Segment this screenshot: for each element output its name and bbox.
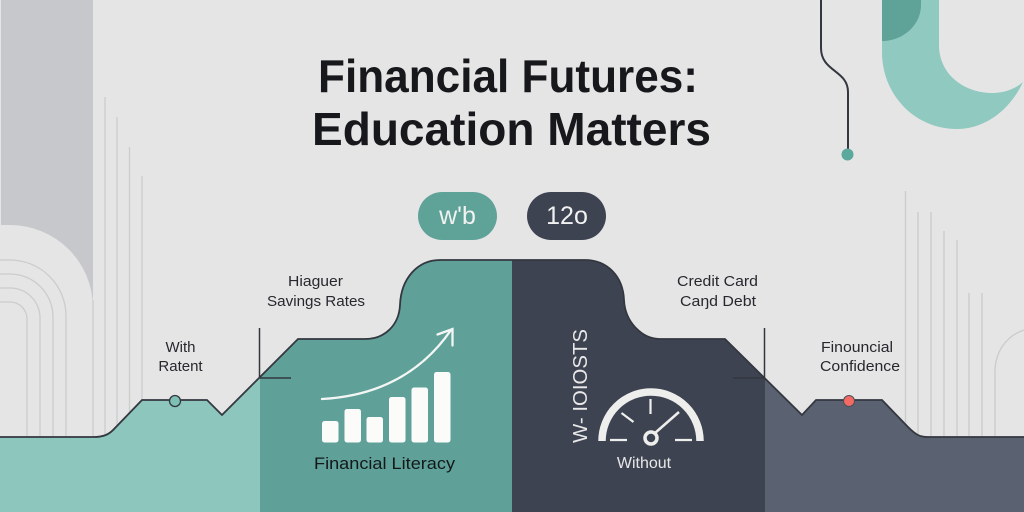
marker: red dot xyxy=(844,396,854,406)
panel: right background lines xyxy=(906,191,1024,437)
label: with ratent: With xyxy=(166,339,196,356)
label: financial confidence xyxy=(820,339,900,375)
label: without: Without xyxy=(617,455,672,472)
label: financial confidence: Confidence xyxy=(820,358,900,375)
label: credit card debt: Caŋd Debt xyxy=(680,293,757,310)
icon: top right teal crescent xyxy=(882,0,1023,129)
label: with ratent xyxy=(158,339,203,375)
badge: dark pill: 12o xyxy=(546,202,588,230)
panel: grey column with arch xyxy=(0,0,142,437)
label: credit card debt xyxy=(677,273,758,310)
bar chart icon xyxy=(322,372,450,442)
title: Education Matters xyxy=(312,103,711,155)
crosshair left xyxy=(260,328,291,378)
icon: gauge xyxy=(602,392,700,444)
title: Financial Futures: xyxy=(318,50,698,102)
badge: teal pill: w'b xyxy=(438,202,476,230)
title xyxy=(312,50,711,155)
label: higher savings rates: Savings Rates xyxy=(267,293,365,310)
icon: growth arrow xyxy=(322,329,452,399)
profile outline xyxy=(0,260,1024,437)
panel: teal with financial literacy xyxy=(260,260,512,512)
badge: dark pill xyxy=(527,192,606,240)
marker: teal dot xyxy=(170,396,180,406)
label: financial confidence: Finouncial xyxy=(821,339,893,356)
label: higher savings rates xyxy=(267,273,365,310)
panel: dark without xyxy=(512,260,765,512)
panel: slate right area xyxy=(765,379,1024,512)
label: credit card debt: Credit Card xyxy=(677,273,758,290)
label: financial literacy: Financial Literacy xyxy=(314,455,456,473)
decorative connector with dot xyxy=(821,0,854,160)
rotated label: W- IOIOSTS xyxy=(570,329,592,443)
label: with ratent: Ratent xyxy=(158,358,203,375)
label: higher savings rates: Hiaguer xyxy=(288,273,343,290)
panel: light teal left area xyxy=(0,377,260,512)
crosshair right xyxy=(733,328,765,378)
badge: teal pill xyxy=(418,192,497,240)
